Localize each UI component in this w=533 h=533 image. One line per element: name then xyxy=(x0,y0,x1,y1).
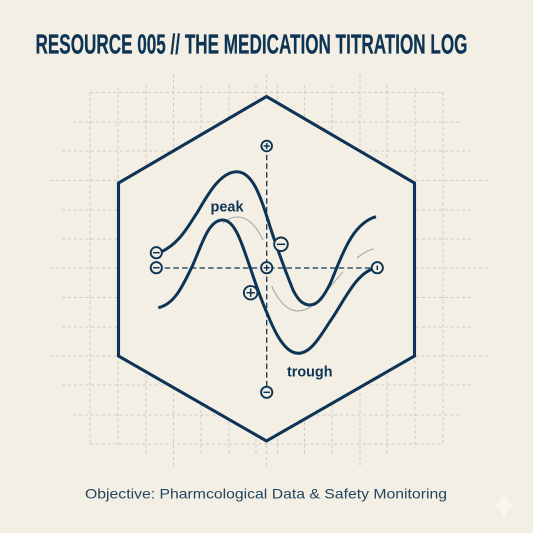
vertical dashed axis xyxy=(266,146,268,393)
faint grey reference curves xyxy=(223,217,374,311)
node: lower left minus xyxy=(151,262,162,273)
label: trough: trough xyxy=(287,364,332,380)
node: curve plus xyxy=(244,286,258,300)
node: center plus xyxy=(261,262,272,273)
label: peak: peak xyxy=(210,200,244,216)
icon: sparkle xyxy=(492,494,516,518)
dashed background grid xyxy=(50,74,488,466)
hexagon frame xyxy=(118,96,414,441)
node: top plus xyxy=(261,141,272,151)
node: bottom minus xyxy=(261,387,272,398)
objective caption: Objective: Pharmcological Data & Safety Monitoring xyxy=(85,486,447,502)
horizontal dashed axis xyxy=(156,267,378,269)
node: curve minus xyxy=(274,238,288,251)
upper titration curve xyxy=(161,172,376,305)
node: right end xyxy=(372,262,383,273)
node: upper left minus xyxy=(151,247,162,258)
lower titration curve xyxy=(158,220,377,353)
